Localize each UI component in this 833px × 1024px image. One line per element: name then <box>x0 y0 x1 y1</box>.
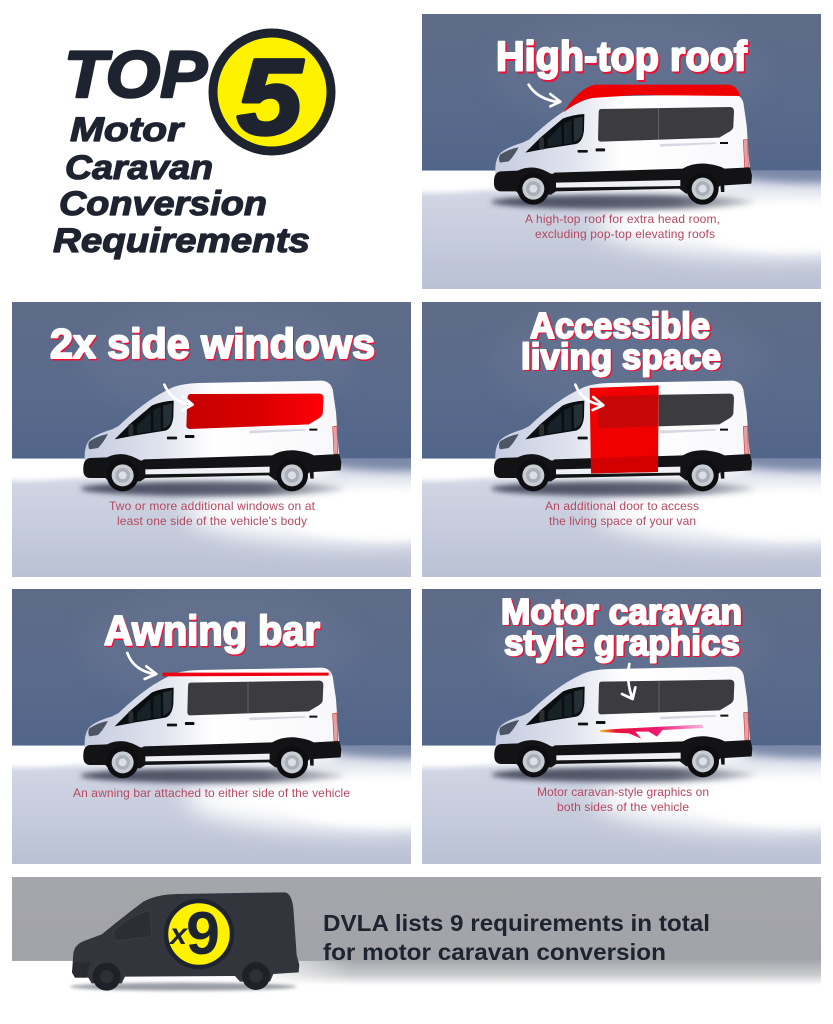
description: Two or more additional windows on at <box>109 499 316 513</box>
heading: Motor caravan style graphics: Motor caravan <box>501 591 742 632</box>
heading: Awning bar: Awning bar <box>105 608 321 656</box>
description <box>537 785 709 814</box>
badge: x9 <box>166 900 232 967</box>
arrow to graphics <box>622 664 635 699</box>
vehicle side graphics <box>600 725 704 739</box>
title: Requirements: Requirements <box>53 222 310 260</box>
description <box>109 499 316 528</box>
description: An awning bar attached to either side of the vehicle <box>73 786 350 800</box>
heading: High-top roof: High-top roof <box>498 34 749 82</box>
heading: 2x side windows: 2x side windows <box>51 322 376 368</box>
heading: Accessible living space: living space <box>521 336 721 377</box>
badge: x9: x <box>168 918 188 951</box>
heading: Accessible living space: living space <box>522 337 722 378</box>
panel: 2x side windows <box>0 302 545 577</box>
description: A high-top roof for extra head room, <box>525 212 720 226</box>
banner: DVLA requirements <box>12 877 821 1009</box>
description <box>525 212 720 241</box>
title: Motor: Motor <box>70 111 185 149</box>
heading: Accessible living space: Accessible <box>530 305 710 346</box>
banner text: for motor caravan conversion <box>323 939 666 965</box>
heading: Accessible living space <box>521 305 722 378</box>
arrow to roof <box>529 85 560 106</box>
heading: Awning bar: Awning bar <box>104 607 320 654</box>
heading: High-top roof: High-top roof <box>496 32 748 80</box>
banner text: DVLA lists 9 requirements in total <box>323 910 710 936</box>
panel: awning bar <box>0 589 545 864</box>
heading: Motor caravan style graphics: Motor caravan <box>502 592 744 633</box>
heading: Motor caravan style graphics: style graphics <box>504 622 740 663</box>
description: An additional door to access <box>545 499 699 513</box>
description: the living space of your van <box>549 514 696 528</box>
banner text <box>323 910 710 965</box>
red raised roof <box>564 85 740 112</box>
red side windows <box>186 394 323 429</box>
title: Caravan: Caravan <box>65 149 213 187</box>
description: Motor caravan-style graphics on <box>537 785 709 799</box>
heading: Motor caravan style graphics <box>501 591 744 664</box>
red awning bar <box>163 673 329 676</box>
heading: Motor caravan style graphics: style graphics <box>506 623 742 664</box>
badge: x9: 9 <box>186 900 220 967</box>
arrow to awning bar <box>127 653 156 679</box>
dark van with x9 badge <box>70 892 299 991</box>
panel: high-top roof <box>339 14 833 289</box>
arrow to windows <box>164 385 193 410</box>
heading: 2x side windows: 2x side windows <box>50 320 375 367</box>
heading: Accessible living space: Accessible <box>532 306 712 347</box>
title block <box>53 33 331 260</box>
description <box>545 499 699 528</box>
badge: number 5 <box>213 33 331 157</box>
badge: number 5: 5 <box>237 36 304 157</box>
panel: motor caravan style graphics <box>339 589 833 864</box>
title: TOP: TOP <box>64 37 208 111</box>
title: Conversion: Conversion <box>59 185 267 223</box>
description: least one side of the vehicle's body <box>117 514 307 528</box>
description: excluding pop-top elevating roofs <box>535 227 715 241</box>
panel: accessible living space <box>339 302 833 577</box>
red sliding door <box>590 385 659 473</box>
arrow to door <box>575 385 603 410</box>
description: both sides of the vehicle <box>557 800 689 814</box>
